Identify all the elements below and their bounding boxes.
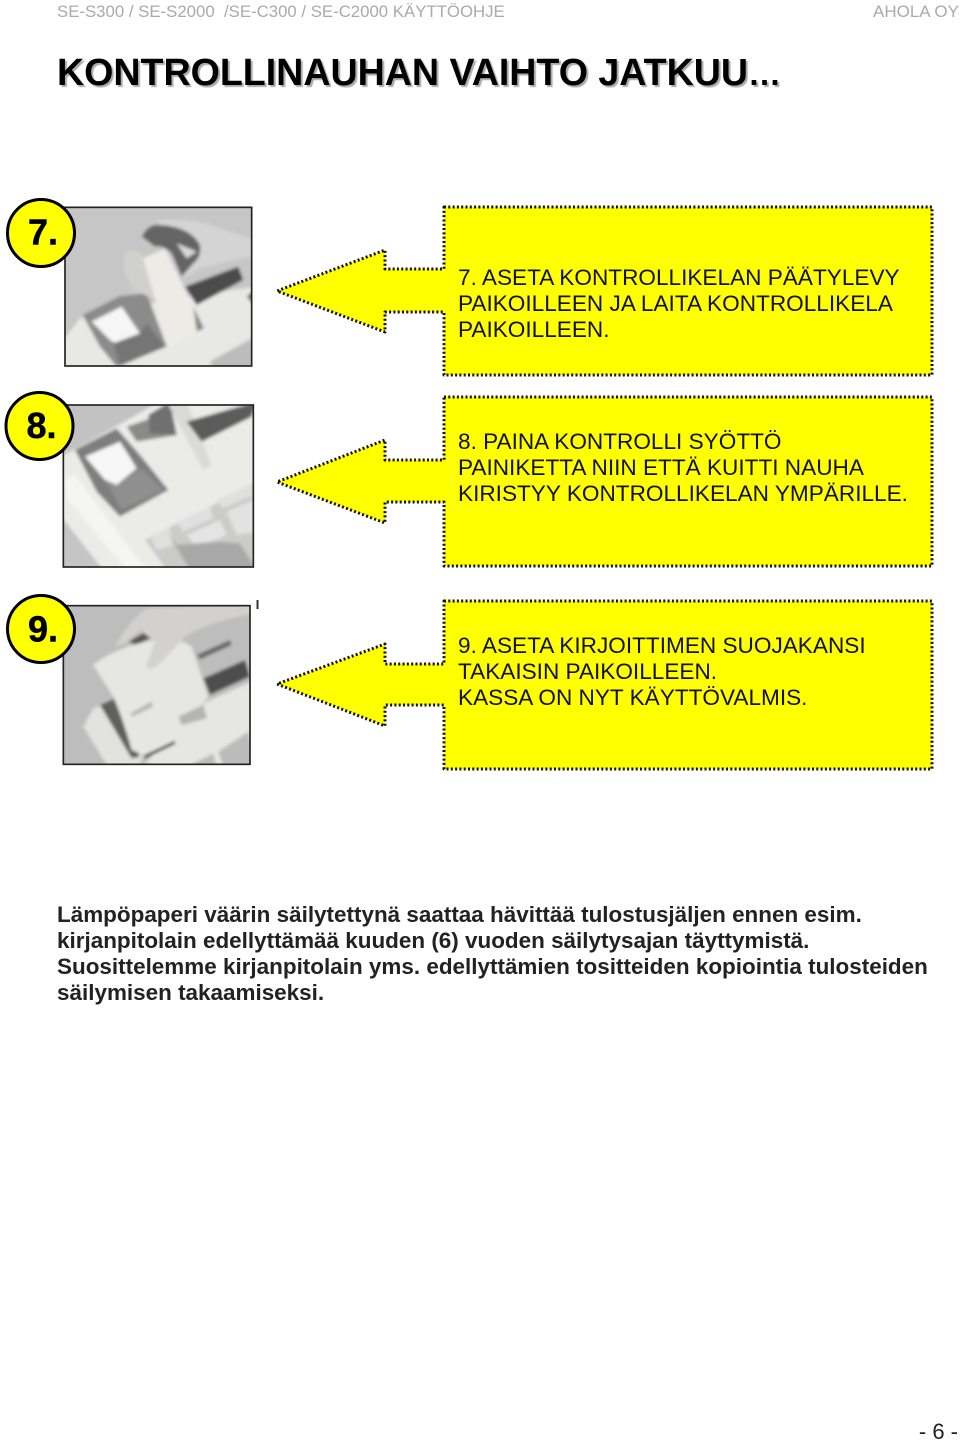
text: step 8: PAINIKETTA NIIN ETTÄ KUITTI NAUHA: [458, 455, 864, 480]
badge: step 8: 8.: [26, 405, 57, 446]
header left: SE-S300 / SE-S2000 /SE-C300 / SE-C2000 KÄYTTÖOHJE: [57, 2, 505, 21]
callout: step 8 box and arrow: [277, 397, 932, 566]
note text: Lämpöpaperi väärin säilytettynä saattaa hävittää tulostusjäljen ennen esim.: [57, 902, 862, 927]
photo: step 9: [58, 600, 255, 770]
text: step 9: [458, 633, 866, 710]
title: KONTROLLINAUHAN VAIHTO JATKUU…: [57, 51, 781, 93]
diagram graphics: [4, 198, 934, 770]
callout: step 7 box and arrow: [277, 207, 932, 375]
callout: step 9 box and arrow: [277, 601, 932, 769]
text: step 9: 9. ASETA KIRJOITTIMEN SUOJAKANSI: [458, 633, 866, 658]
text: step 8: KIRISTYY KONTROLLIKELAN YMPÄRILLE.: [458, 481, 908, 506]
badge: step 8: [6, 392, 73, 460]
text: step 9: KASSA ON NYT KÄYTTÖVALMIS.: [458, 685, 807, 710]
text: step 7: PAIKOILLEEN.: [458, 317, 610, 342]
photo: step 7: [60, 202, 257, 372]
badge: step 9: 9.: [28, 608, 58, 650]
note text: [57, 902, 928, 1005]
text: step 8: [458, 429, 908, 506]
note text: kirjanpitolain edellyttämää kuuden (6) vuoden säilytysajan täyttymistä.: [57, 928, 809, 953]
header right: AHOLA OY: [873, 2, 959, 21]
stray mark: [256, 600, 258, 609]
note text: säilymisen takaamiseksi.: [57, 980, 324, 1005]
text: step 7: PAIKOILLEEN JA LAITA KONTROLLIKELA: [458, 291, 893, 316]
text: step 7: 7. ASETA KONTROLLIKELAN PÄÄTYLEVY: [458, 265, 900, 290]
text: step 9: TAKAISIN PAIKOILLEEN.: [458, 659, 717, 684]
photo: step 8: [58, 400, 258, 572]
note text: Suosittelemme kirjanpitolain yms. edellyttämien tositteiden kopiointia tulosteiden: [57, 954, 928, 979]
badge: step 9: [8, 596, 74, 662]
badge: step 7: [8, 200, 74, 266]
text: step 7: [458, 265, 900, 342]
badge: step 7: 7.: [28, 212, 58, 252]
text: step 8: 8. PAINA KONTROLLI SYÖTTÖ: [458, 429, 782, 454]
